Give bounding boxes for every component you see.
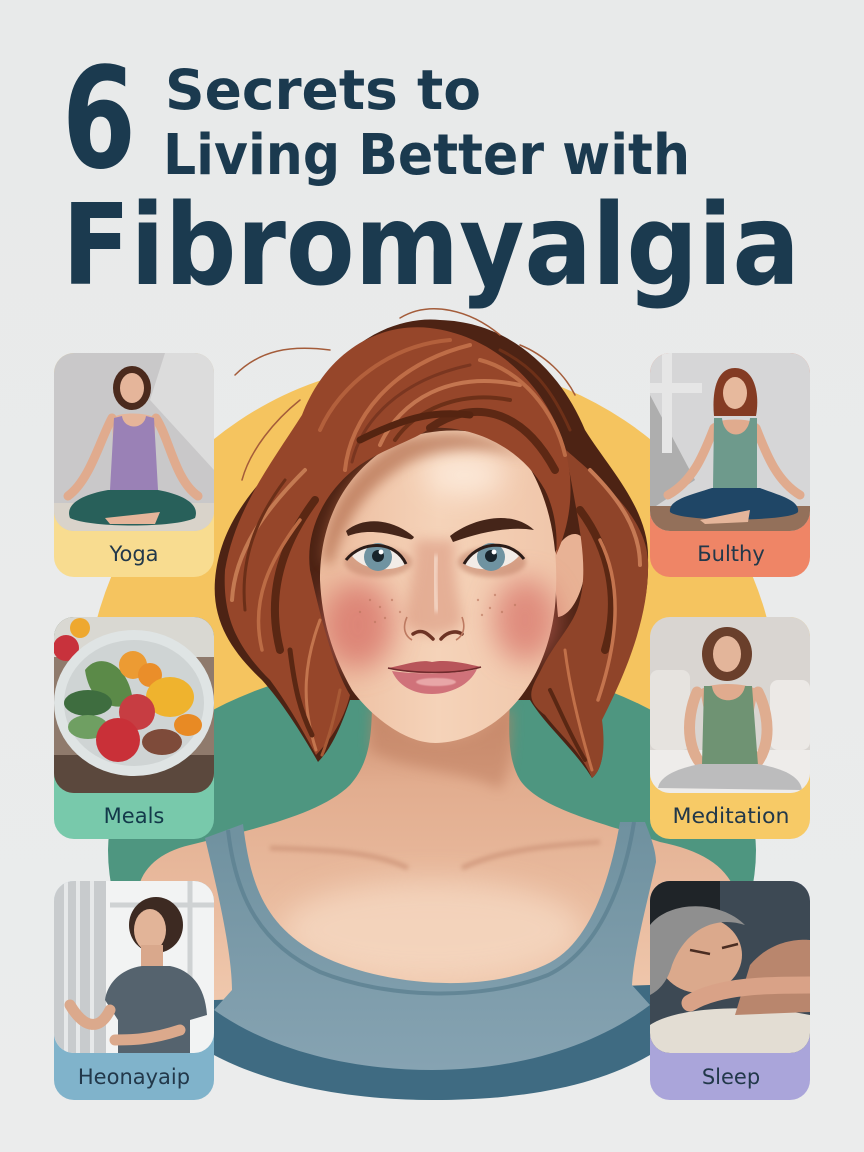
label: Meals [104, 804, 164, 828]
photo: plate of food [53, 617, 214, 793]
title number 6: 6 [62, 38, 136, 201]
card base [54, 353, 214, 577]
catchlight [379, 550, 383, 554]
lower lip [392, 669, 477, 694]
card base [650, 881, 810, 1100]
photo: yoga woman in purple [54, 353, 214, 533]
left eyebrow [346, 521, 414, 539]
eye shadow [344, 547, 412, 577]
photo: woman by window [54, 881, 214, 1053]
cheek blush right [493, 578, 557, 662]
catchlight [492, 550, 496, 554]
photo: meditating woman on bed [650, 617, 810, 794]
card base [650, 353, 810, 577]
lip highlight [416, 678, 456, 686]
green background circle [108, 660, 756, 1100]
pupil [372, 550, 384, 562]
upper lip [388, 661, 481, 673]
pupil [485, 550, 497, 562]
white of eye [464, 547, 519, 569]
front hair [225, 327, 571, 755]
eye shadow [458, 547, 526, 577]
upper lashes [346, 545, 406, 564]
chest shading [282, 880, 582, 980]
nose outline [405, 617, 464, 640]
title line: Fibromyalgia: Fibromyalgia [62, 181, 800, 311]
label: Heonayaip [78, 1065, 190, 1089]
card: Meals [53, 617, 214, 839]
nostrils [413, 631, 462, 639]
title [62, 38, 800, 311]
white of eye [352, 547, 406, 569]
label: Sleep [702, 1065, 760, 1089]
face [320, 430, 556, 743]
card base [54, 881, 214, 1100]
label: Yoga [108, 542, 159, 566]
tank top [205, 822, 656, 1070]
tank neckline trim [228, 822, 634, 993]
title line: Secrets to: Secrets to [165, 58, 481, 122]
right ear [553, 534, 586, 617]
back hair [215, 320, 648, 778]
yellow background circle [85, 362, 779, 1056]
label: Meditation [672, 804, 790, 828]
card base [650, 617, 810, 839]
forehead hair shadow [322, 433, 525, 565]
iris [477, 543, 505, 571]
right side hair [531, 450, 648, 778]
card: Heonayaip [54, 881, 214, 1100]
card: Yoga [54, 353, 214, 577]
photo: woman sleeping [650, 881, 810, 1053]
label: Бulthy [697, 542, 765, 566]
nose shading [405, 540, 463, 635]
shoulders and chest [130, 690, 735, 1010]
cheek blush left [322, 581, 394, 669]
central portrait of a woman [130, 309, 735, 1100]
card base [54, 617, 214, 839]
iris [364, 543, 392, 571]
card: Bulthy [650, 353, 810, 577]
right eye [458, 543, 526, 577]
right eyebrow [450, 518, 534, 542]
freckles [359, 594, 516, 623]
lip line [388, 667, 481, 672]
hair strands [232, 309, 640, 770]
lips [388, 661, 481, 694]
nose [405, 540, 464, 640]
title line: Living Better with: Living Better with [163, 123, 690, 188]
dark ring under tank [214, 985, 650, 1100]
photo: seated woman in green [650, 353, 810, 533]
forehead highlight [425, 455, 505, 495]
left eye [344, 543, 412, 577]
card: Sleep [650, 881, 810, 1100]
neck shadow [370, 700, 512, 790]
collarbones [270, 842, 600, 868]
card: Meditation [650, 617, 810, 839]
nose highlight [435, 555, 437, 612]
upper lashes [464, 545, 524, 564]
